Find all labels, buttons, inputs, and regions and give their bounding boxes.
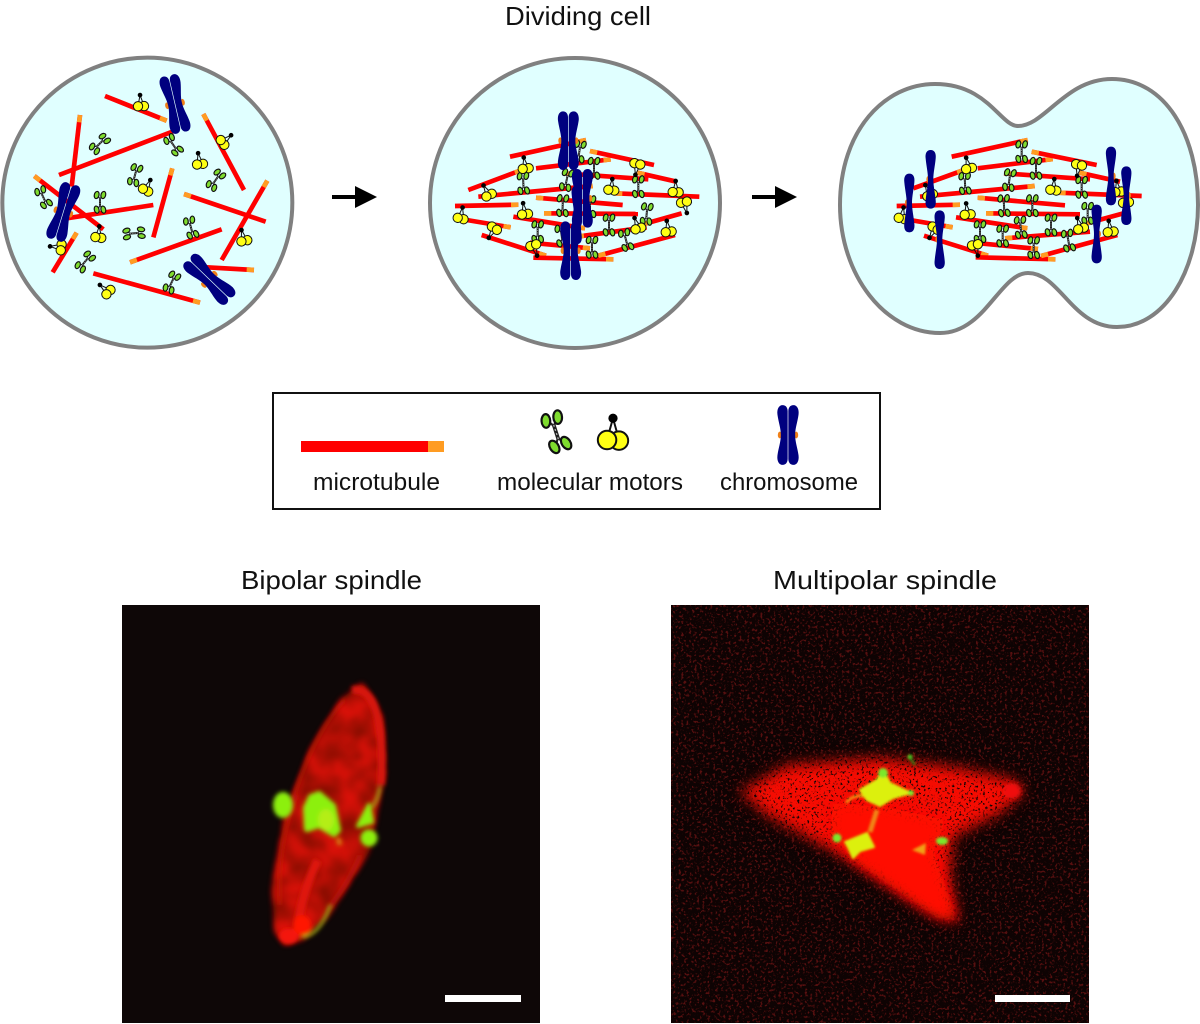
- legend label: chromosome: chromosome: [720, 469, 858, 496]
- legend box: [273, 393, 880, 509]
- chromosome signal: [273, 792, 378, 846]
- legend label: microtubule: microtubule: [313, 469, 440, 496]
- molecular motors: [33, 92, 253, 301]
- legend label: molecular motors: molecular motors: [497, 469, 683, 496]
- legend icon: chromosome: [777, 405, 799, 465]
- legend icon: microtubule: [301, 441, 444, 452]
- panel: cell dividing with separated chromatids: [840, 79, 1198, 333]
- heading: Bipolar spindle: Bipolar spindle: [241, 565, 422, 595]
- micrograph: multipolar spindle: [671, 605, 1089, 1023]
- cell body: [840, 79, 1198, 333]
- legend icon: green motor: [538, 408, 574, 456]
- motors: [893, 140, 1136, 260]
- cell body: [430, 58, 720, 348]
- panel: cell with spindle: [430, 58, 720, 348]
- chromosomes: [558, 111, 593, 280]
- arrow 1: [332, 186, 377, 208]
- microtubules: [897, 140, 1142, 259]
- chromosome signal: [832, 754, 948, 858]
- chromosomes: [45, 73, 238, 307]
- microtubules: [34, 96, 267, 303]
- cell body: [2, 58, 292, 348]
- panel: cell with scattered microtubules: [2, 58, 292, 348]
- dense spindle core: [830, 803, 957, 920]
- bright spindle pole: [1003, 783, 1021, 799]
- spindle microtubules: [455, 140, 699, 259]
- micrograph: bipolar spindle: [122, 605, 540, 1023]
- spindle body: [272, 683, 385, 945]
- chromatids: [904, 147, 1131, 269]
- heading: Multipolar spindle: Multipolar spindle: [773, 565, 997, 595]
- legend icon: yellow motor: [598, 414, 628, 450]
- scale bar: [445, 995, 521, 1002]
- title: Dividing cell: Dividing cell: [505, 1, 651, 31]
- mottled fibres: [272, 683, 385, 945]
- arrow 2: [752, 186, 797, 208]
- spindle contents: [893, 140, 1142, 269]
- spindle fibres: [279, 690, 382, 944]
- motors: [452, 139, 695, 260]
- speckled spindle: [740, 758, 1024, 922]
- scale bar: [995, 995, 1070, 1002]
